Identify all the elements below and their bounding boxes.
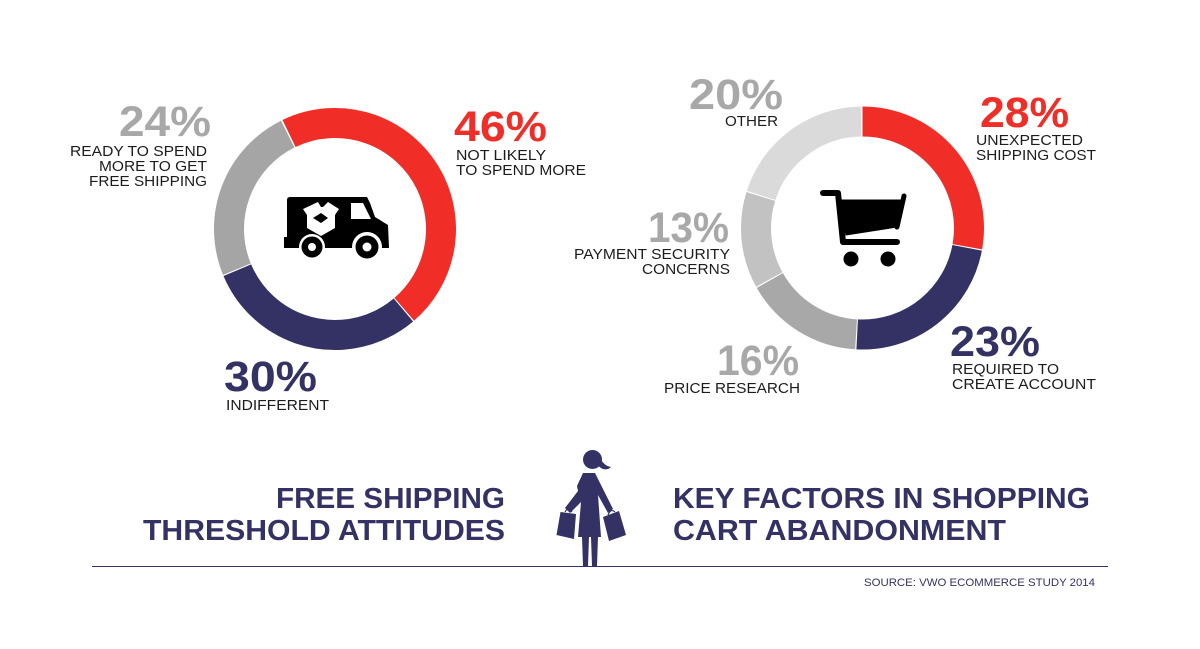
heading: key factors in shopping cart abandonment: CART ABANDONMENT [673, 515, 1007, 547]
label: 28% unexpected shipping cost: 28% [980, 89, 1069, 137]
label: 20% other: OTHER [725, 113, 778, 130]
source note: SOURCE: VWO ECOMMERCE STUDY 2014 [864, 577, 1095, 589]
label: 24% ready to spend more: MORE TO GET [99, 158, 207, 175]
label: 24% ready to spend more: 24% [119, 98, 211, 146]
label: 13% payment security concerns: 13% [648, 204, 729, 252]
label: 23% required to create account [950, 318, 1096, 393]
heading: free shipping threshold attitudes [143, 483, 505, 547]
baseline rule [92, 566, 1108, 567]
heading: key factors in shopping cart abandonment [673, 483, 1090, 547]
label: 23% required to create account: CREATE ACCOUNT [952, 376, 1096, 393]
label: 28% unexpected shipping cost: UNEXPECTED [976, 132, 1083, 149]
label: 16% price research: 16% [717, 337, 799, 385]
label: 46% not likely to spend more [454, 103, 586, 179]
icon: woman with shopping bags [556, 450, 626, 566]
label: 24% ready to spend more: FREE SHIPPING [89, 173, 207, 190]
label: 46% not likely to spend more: NOT LIKELY [456, 147, 546, 164]
label: 13% payment security concerns [574, 204, 730, 278]
icon: shopping cart [823, 193, 904, 266]
label: 30% indifferent: 30% [224, 353, 317, 401]
donut chart: free shipping threshold attitudes [194, 88, 476, 370]
label: 16% price research: PRICE RESEARCH [664, 380, 800, 397]
label: 13% payment security concerns: PAYMENT SECURITY [574, 246, 730, 263]
heading: free shipping threshold attitudes: THRESHOLD ATTITUDES [143, 515, 505, 547]
label: 23% required to create account: REQUIRED TO [952, 361, 1059, 378]
label: 13% payment security concerns: CONCERNS [642, 261, 730, 278]
donut chart: key factors in cart abandonment [756, 122, 969, 334]
label: 30% indifferent [224, 353, 329, 414]
label: 16% price research [664, 337, 800, 397]
heading: free shipping threshold attitudes: FREE SHIPPING [276, 483, 505, 515]
label: 30% indifferent: INDIFFERENT [226, 397, 329, 414]
label: 24% ready to spend more [70, 98, 211, 190]
label: 28% unexpected shipping cost: SHIPPING COST [976, 147, 1096, 164]
label: 46% not likely to spend more: 46% [454, 103, 547, 151]
label: 46% not likely to spend more: TO SPEND MORE [456, 162, 586, 179]
label: 28% unexpected shipping cost [976, 89, 1096, 164]
label: 20% other: 20% [689, 71, 783, 119]
icon: delivery truck [284, 197, 389, 262]
heading: key factors in shopping cart abandonment: KEY FACTORS IN SHOPPING [673, 483, 1090, 515]
label: 23% required to create account: 23% [950, 318, 1040, 366]
label: 24% ready to spend more: READY TO SPEND [70, 143, 207, 160]
